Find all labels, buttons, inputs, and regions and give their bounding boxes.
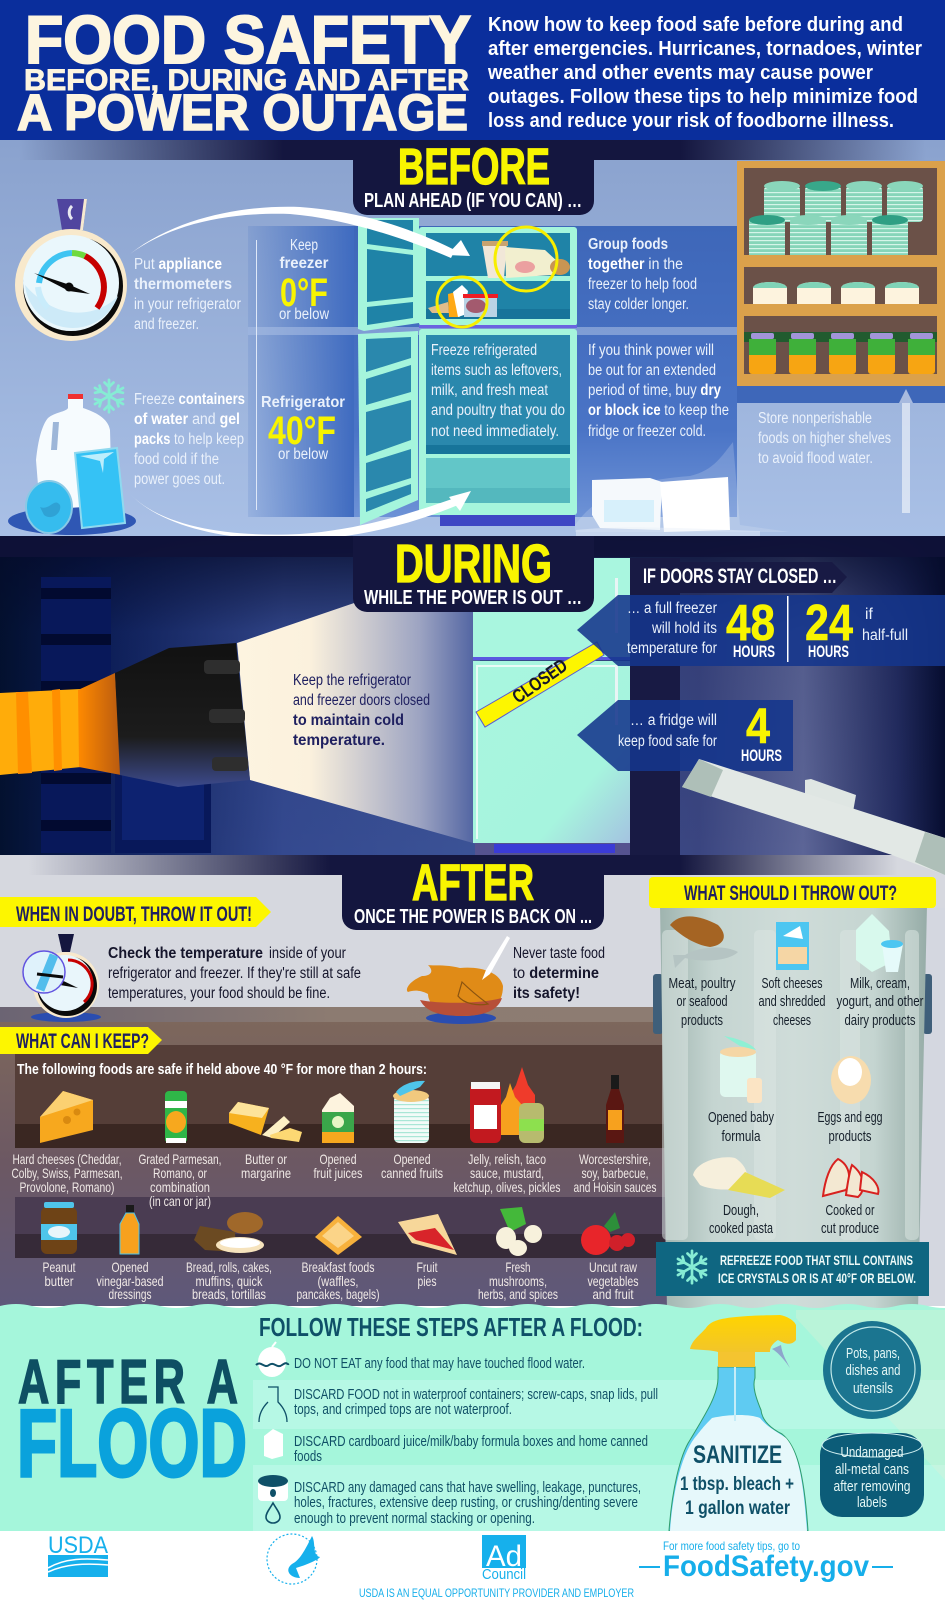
keep labels: row 1: ketchup, olives, pickles: [454, 1179, 560, 1195]
equal opportunity statement: USDA IS AN EQUAL OPPORTUNITY PROVIDER AND EMPLOYER: [359, 1586, 634, 1600]
badge: pots and pans: dishes and: [846, 1362, 900, 1379]
icon: spray bottle: 1 gallon water: [685, 1498, 791, 1519]
text: freeze refrigerated items: not need immediately.: [431, 423, 559, 440]
keep labels: row 1: Hard cheeses (Cheddar,: [12, 1151, 122, 1167]
title: FOOD SAFETY: [25, 2, 471, 78]
text: meat: [668, 976, 736, 1029]
text: dry or block ice: [588, 342, 729, 440]
keep labels: row 1: soy, barbecue,: [582, 1165, 648, 1181]
keep labels: row 2: Uncut raw: [589, 1259, 638, 1275]
shelf silhouette: [41, 577, 211, 853]
intro paragraph: weather and other events may cause power: [487, 62, 873, 84]
keep labels: row 1: margarine: [241, 1165, 291, 1181]
text: store nonperishable: Store nonperishable: [758, 410, 872, 427]
text: soft cheeses: cheeses: [773, 1013, 811, 1029]
keep labels: row 2: Fruit: [416, 1259, 438, 1275]
text: group foods: [588, 236, 697, 313]
freezer temperature: Keep: [290, 237, 318, 254]
text: check the temperature: [108, 945, 361, 1002]
section heading before: BEFORE: [398, 138, 550, 195]
keep labels: row 1: Colby, Swiss, Parmesan,: [12, 1165, 122, 1181]
icon: damaged can and drop: [258, 1475, 288, 1523]
keep labels: row 1: fruit juices: [314, 1165, 362, 1181]
banner: what should I throw out: [649, 877, 936, 908]
keep labels: row 1: (in can or jar): [149, 1193, 211, 1209]
icon: open can: [393, 1081, 429, 1143]
icon: cheese: [40, 1091, 93, 1143]
text: appliance thermometers: thermometers: [134, 276, 232, 293]
arrow: to freezer: [130, 207, 470, 258]
badge: pots and pans: utensils: [853, 1380, 893, 1397]
text: dry or block ice: be out for an extended: [588, 362, 716, 379]
text: dry or block ice: period of time, buy dry: [588, 382, 721, 399]
banner: if doors stay closed: IF DOORS STAY CLOSED …: [643, 565, 837, 588]
logo: USDA: USDA: [48, 1532, 108, 1559]
yellow circles: [437, 227, 557, 327]
freezer food: [428, 241, 570, 317]
section heading after: AFTER: [412, 854, 534, 911]
arrow: upward to shelf: [899, 389, 913, 513]
panel: trash can: [649, 877, 936, 1310]
icon: spray bottle: SANITIZE: [693, 1441, 782, 1469]
intro paragraph: [487, 14, 922, 132]
freezer temperature: or below: [279, 306, 330, 323]
keep labels: row 1: Opened: [320, 1151, 356, 1167]
blue backdrop panels: [248, 226, 945, 517]
panel: before: [0, 138, 945, 540]
text: keep doors closed: and freezer doors closed: [293, 692, 430, 709]
text: store nonperishable: foods on higher shelves: [758, 430, 891, 447]
text: dry or block ice: or block ice to keep the: [588, 402, 729, 419]
panel: after a flood: [0, 1304, 945, 1531]
text: dairy: yogurt, and other: [836, 994, 924, 1010]
text: check the temperature: inside of your: [269, 945, 346, 962]
icon: soft cheese bag: [776, 922, 809, 970]
text: do not eat: DO NOT EAT any food that may have touched flood water.: [294, 1355, 585, 1372]
arrow: to refrigerator: [130, 491, 471, 540]
text: keep doors closed: [293, 672, 430, 749]
text: freeze containers: food cold if the: [134, 451, 219, 468]
text: store nonperishable: to avoid flood water.: [758, 450, 873, 467]
text: discard cardboard: [294, 1433, 648, 1465]
keep labels: row 1: Butter or: [245, 1151, 287, 1167]
title: [17, 2, 471, 141]
keep labels: row 2: Opened: [112, 1259, 148, 1275]
text: freeze refrigerated items: Freeze refrigerated: [431, 342, 537, 359]
text: discard food: tops, and crimped tops are not waterproof.: [294, 1401, 512, 1418]
keep labels: row 1: canned fruits: [381, 1165, 443, 1181]
icon: mushrooms: [496, 1207, 542, 1256]
text: never taste food: Never taste food: [513, 945, 605, 962]
light beam: [237, 560, 480, 845]
text: freeze containers: Freeze containers: [134, 391, 245, 408]
refrigerator: [358, 218, 577, 526]
keep foods: row 2: [41, 1202, 635, 1256]
icon: dry ice blocks: [575, 442, 790, 536]
callout: freezer hours: HOURS: [733, 642, 775, 661]
icon: appliance thermometer: [15, 199, 127, 341]
text: discard damaged cans: enough to prevent normal stacking or opening.: [294, 1510, 535, 1527]
cans: [749, 181, 923, 255]
callout: freezer hours: will hold its: [651, 620, 717, 637]
text: discard cardboard: DISCARD cardboard juice/milk/baby formula boxes and home canned: [294, 1433, 648, 1450]
text: keep doors closed: temperature.: [293, 732, 385, 749]
text: appliance thermometers: and freezer.: [134, 316, 199, 333]
intro paragraph: outages. Follow these tips to help minimize food: [488, 86, 918, 108]
icon: carton: [264, 1429, 283, 1459]
text: discard damaged cans: holes, fractures, extensive deep rusting, or crushing/denting severe: [294, 1494, 638, 1511]
text: baby formula: Opened baby: [708, 1110, 775, 1126]
text: soft cheeses: Soft cheeses: [762, 976, 822, 992]
title: BEFORE, DURING AND AFTER: [24, 64, 469, 97]
cream cans: [753, 282, 919, 304]
text: appliance thermometers: in your refrigerator: [134, 296, 241, 313]
text: cooked produce: [821, 1203, 879, 1237]
text: freeze containers: power goes out.: [134, 471, 225, 488]
keep labels: row 1: Jelly, relish, taco: [468, 1151, 546, 1167]
refrigerator temperature: [261, 394, 345, 463]
logo: Ad Council: [482, 1535, 526, 1583]
icon: sauce bottle: [606, 1075, 624, 1143]
logo: Ad Council: Council: [482, 1566, 526, 1583]
text: discard food: [294, 1386, 658, 1418]
text: discard damaged cans: DISCARD any damaged cans that have swelling, leakage, punctures,: [294, 1479, 641, 1496]
text: discard food: DISCARD FOOD not in waterproof containers; screw-caps, snap lids, pull: [294, 1386, 658, 1403]
text: cooked produce: Cooked or: [826, 1203, 875, 1219]
keep labels: row 1: Romano, or: [153, 1165, 207, 1181]
jars: [744, 332, 937, 374]
icon: waffle: [315, 1216, 362, 1255]
section heading after: ONCE THE POWER IS BACK ON ...: [354, 906, 592, 928]
text: dairy: [836, 976, 924, 1029]
badge: metal cans: after removing: [834, 1478, 910, 1495]
text: freeze refrigerated items: milk, and fresh meat: [431, 382, 549, 399]
text: freeze containers: packs to help keep: [134, 431, 244, 448]
text: dry or block ice: If you think power will: [588, 342, 714, 359]
text: cooked produce: cut produce: [821, 1221, 879, 1237]
text: never taste food: [513, 945, 605, 1002]
keep labels: row 1: sauce, mustard,: [470, 1165, 544, 1181]
freezer temperature: 0°F: [280, 271, 328, 315]
text: eggs: [818, 1110, 882, 1145]
icon: baby formula: [720, 1036, 762, 1103]
text: discard damaged cans: [294, 1479, 641, 1527]
icon: pie: [398, 1214, 457, 1255]
keep labels: row 2: Breakfast foods: [302, 1259, 374, 1275]
banner: when in doubt: WHEN IN DOUBT, THROW IT OUT!: [16, 903, 252, 926]
logo: Ad Council: Ad: [486, 1540, 522, 1573]
callout: freezer hours: HOURS: [808, 642, 849, 661]
badge: pots and pans: [823, 1321, 921, 1419]
flashlight-like bar: fridge handle: [682, 759, 945, 875]
keep labels: row 2: Bread, rolls, cakes,: [186, 1259, 272, 1275]
keep labels: row 2: pancakes, bagels): [296, 1286, 380, 1302]
intro paragraph: after emergencies. Hurricanes, tornadoes, winter: [488, 38, 922, 60]
icon: apple in water: [256, 1342, 289, 1377]
keep labels: row 2: dressings: [108, 1286, 152, 1302]
refrigerator closed: [473, 558, 680, 855]
badge: metal cans: all-metal cans: [835, 1461, 909, 1478]
text: group foods: freezer to help food: [588, 276, 697, 293]
shelf: [737, 161, 945, 386]
text: never taste food: its safety!: [513, 985, 580, 1002]
banner: when in doubt: [0, 897, 271, 927]
freezer temperature: [279, 237, 330, 323]
callout: freezer hours: [577, 594, 945, 666]
text: never taste food: to determine: [513, 965, 599, 982]
call to action: FoodSafety.gov: For more food safety tips, go to: [663, 1539, 800, 1553]
icon: bottle: [259, 1387, 287, 1422]
panel: after: [0, 759, 945, 1310]
icon: dressing bottle: [120, 1205, 139, 1254]
text: appliance thermometers: Put appliance: [134, 256, 222, 273]
keep labels: row 2: (waffles,: [318, 1273, 358, 1289]
icon: breads: [194, 1212, 264, 1253]
keep labels: row 2: [42, 1259, 638, 1302]
intro paragraph: Know how to keep food safe before during and: [488, 14, 903, 36]
keep labels: row 2: mushrooms,: [489, 1273, 547, 1289]
text: freeze refrigerated items: [431, 342, 565, 440]
refrigerator temperature: Refrigerator: [261, 394, 345, 411]
call to action: FoodSafety.gov: [639, 1539, 893, 1583]
icon: peanut butter: [41, 1202, 77, 1254]
text: store nonperishable: [758, 410, 891, 467]
text: discard cardboard: foods: [294, 1448, 322, 1465]
icon: dough and pasta: [693, 1157, 785, 1198]
keep labels: row 2: Fresh: [506, 1259, 530, 1275]
section heading before: PLAN AHEAD (IF YOU CAN) …: [364, 190, 582, 212]
keep labels: row 2: herbs, and spices: [478, 1286, 558, 1302]
text: baby formula: [708, 1110, 775, 1145]
badge: pots and pans: Pots, pans,: [846, 1345, 900, 1362]
heading: after a flood: AFTER A: [18, 1349, 244, 1417]
tape: closed, under panel: [476, 642, 604, 727]
icon: milk and yogurt: [856, 914, 903, 972]
call to action: FoodSafety.gov: FoodSafety.gov: [663, 1550, 869, 1583]
text: eggs: Eggs and egg: [818, 1110, 882, 1126]
icon: spray bottle: [669, 1315, 808, 1531]
footer: [0, 1531, 945, 1600]
text: freeze containers: [134, 391, 245, 488]
text: group foods: Group foods: [588, 236, 668, 253]
panel: during: [0, 534, 945, 855]
logo: USDA: [48, 1532, 108, 1577]
badge: metal cans: [820, 1433, 924, 1517]
callout: freezer hours: temperature for: [627, 640, 717, 657]
icon: roast turkey: [407, 936, 510, 1024]
banner: what can I keep: [0, 1027, 162, 1054]
text: dough: Dough,: [723, 1203, 759, 1219]
callout: fridge hours: 4: [746, 698, 770, 754]
refrigerator temperature: 40°F: [268, 409, 336, 453]
callout: freezer hours: if: [865, 606, 873, 623]
callout: fridge hours: [577, 698, 793, 771]
text: eggs: products: [828, 1129, 872, 1145]
callout: refreeze: [656, 1242, 929, 1296]
intro paragraph: loss and reduce your risk of foodborne illness.: [488, 110, 894, 132]
badge: metal cans: labels: [857, 1494, 887, 1511]
text: soft cheeses: and shredded: [758, 994, 826, 1010]
keep labels: row 2: pies: [418, 1273, 436, 1289]
callout: fridge hours: … a fridge will: [630, 712, 717, 729]
keep labels: row 1: Worcestershire,: [579, 1151, 651, 1167]
text: dough: cooked pasta: [709, 1221, 774, 1237]
keep labels: row 1: and Hoisin sauces: [574, 1179, 656, 1195]
text: meat: or seafood: [676, 994, 728, 1010]
text: keep doors closed: Keep the refrigerator: [293, 672, 411, 689]
text: check the temperature: temperatures, your food should be fine.: [108, 985, 330, 1002]
icon: poultry and fish: [670, 916, 738, 968]
callout: freezer hours: 24: [805, 594, 854, 651]
icon: butter: [229, 1102, 302, 1142]
keep labels: row 2: vinegar-based: [96, 1273, 164, 1289]
keep labels: row 1: Provolone, Romano): [20, 1179, 114, 1195]
heading: after a flood: FLOOD: [17, 1390, 247, 1497]
text: meat: Meat, poultry: [668, 976, 736, 992]
icon: parmesan: [165, 1091, 187, 1143]
callout: freezer hours: half-full: [862, 627, 908, 644]
banner: if doors stay closed: [630, 562, 847, 593]
keep labels: row 1: Grated Parmesan,: [138, 1151, 222, 1167]
text: dairy: dairy products: [844, 1013, 916, 1029]
text: check the temperature: Check the temperature: [108, 945, 263, 962]
tape label: closed: CLOSED: [509, 655, 572, 708]
section heading during: WHILE THE POWER IS OUT …: [364, 587, 582, 609]
text: freeze containers: of water and gel: [134, 411, 240, 428]
callout: freezer hours: 48: [726, 594, 775, 651]
flashlight: [0, 643, 250, 787]
keep labels: row 1: combination: [150, 1179, 210, 1195]
text: freeze refrigerated items: and poultry that you do: [431, 402, 565, 419]
keep labels: row 2: and fruit: [592, 1286, 634, 1302]
icon: condiments: [470, 1067, 544, 1143]
heading: after a flood: [17, 1349, 247, 1497]
callout: fridge hours: keep food safe for: [618, 733, 717, 750]
text: baby formula: formula: [722, 1129, 761, 1145]
icon: spray bottle: 1 tbsp. bleach +: [680, 1474, 794, 1495]
text: keep doors closed: to maintain cold: [293, 712, 404, 729]
keep labels: row 2: Peanut: [42, 1259, 76, 1275]
icon: juice carton: [322, 1093, 354, 1143]
icon: thermometer and magnifier: [23, 934, 101, 1022]
text: safe foods intro: The following foods are safe if held above 40 °F for more than 2 hours:: [17, 1061, 427, 1078]
text: group foods: stay colder longer.: [588, 296, 689, 313]
title: A POWER OUTAGE: [17, 84, 468, 141]
keep foods: row 1: [40, 1067, 624, 1143]
text: group foods: together in the: [588, 256, 683, 273]
text: dough: [709, 1203, 774, 1237]
text: freeze refrigerated items: items such as leftovers,: [431, 362, 562, 379]
keep labels: row 2: butter: [44, 1273, 74, 1289]
callout: freezer hours: … a full freezer: [627, 600, 717, 617]
header banner: [0, 0, 945, 141]
text: appliance thermometers: [134, 256, 241, 333]
section heading after: [342, 854, 604, 930]
text: dairy: Milk, cream,: [850, 976, 910, 992]
keep labels: row 2: vegetables: [588, 1273, 638, 1289]
icon: vegetables: [581, 1212, 635, 1255]
icon: milk jug and gel packs: [8, 380, 136, 535]
food panels: [15, 1045, 665, 1258]
section heading before: [353, 138, 594, 215]
keep labels: row 2: muffins, quick: [196, 1273, 263, 1289]
refrigerator temperature: or below: [278, 446, 329, 463]
keep labels: row 1: [12, 1151, 656, 1209]
logo: HHS: [267, 1534, 320, 1584]
icon: cut produce: [823, 1159, 878, 1197]
callout: fridge hours: HOURS: [741, 746, 782, 765]
keep labels: row 1: Opened: [394, 1151, 430, 1167]
badge: metal cans: Undamaged: [840, 1444, 904, 1461]
section heading during: [353, 534, 594, 612]
section heading during: DURING: [395, 534, 552, 594]
heading: follow these steps: FOLLOW THESE STEPS AFTER A FLOOD:: [259, 1312, 643, 1342]
banner: what can I keep: WHAT CAN I KEEP?: [16, 1030, 149, 1053]
freezer temperature: freezer: [280, 255, 328, 272]
text: meat: products: [681, 1013, 723, 1029]
text: soft cheeses: [758, 976, 826, 1029]
icon: egg: [831, 1056, 871, 1104]
text: check the temperature: refrigerator and freezer. If they're still at safe: [108, 965, 361, 982]
text: dry or block ice: fridge or freezer cold.: [588, 423, 706, 440]
keep labels: row 2: breads, tortillas: [192, 1286, 266, 1302]
